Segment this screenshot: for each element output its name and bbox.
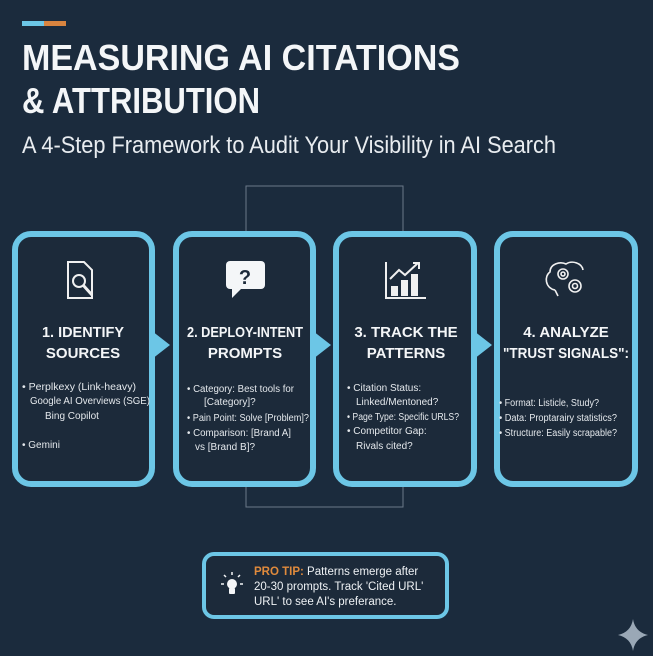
pro tip box xyxy=(204,554,447,617)
card 4 xyxy=(497,234,635,484)
bullets: • Page Type: Specific URLS? xyxy=(347,412,459,423)
title xyxy=(22,37,460,121)
tip text: PRO TIP: Patterns emerge after xyxy=(254,566,418,578)
connector lines xyxy=(246,186,403,507)
heading xyxy=(187,324,303,362)
heading: PATTERNS xyxy=(367,345,445,362)
heading: 2. DEPLOY-INTENT xyxy=(187,324,303,341)
card 1 xyxy=(15,234,152,484)
bullets: • Category: Best tools for xyxy=(187,384,295,395)
bullets: vs [Brand B]? xyxy=(195,442,255,453)
bullets: • Citation Status: xyxy=(347,383,421,394)
title: & ATTRIBUTION xyxy=(22,80,260,121)
bullets: • Perplkexy (Link-heavy) xyxy=(22,382,136,393)
bullets: • Comparison: [Brand A] xyxy=(187,428,291,439)
bullets: • Competitor Gap: xyxy=(347,426,427,437)
heading xyxy=(354,324,458,362)
bullets: • Pain Point: Solve [Problem]? xyxy=(187,413,309,424)
bullets: • Gemini xyxy=(22,440,60,451)
bullets: Rivals cited? xyxy=(356,441,413,452)
bullets: • Format: Listicle, Study? xyxy=(499,398,599,409)
heading: 3. TRACK THE xyxy=(354,324,458,341)
subtitle: A 4-Step Framework to Audit Your Visibility in AI Search xyxy=(22,132,556,159)
bullets: Linked/Mentoned? xyxy=(356,397,439,408)
bullets: • Data: Proptarairy statistics? xyxy=(499,413,617,424)
heading xyxy=(42,324,124,362)
bullets xyxy=(187,384,309,453)
tip text: URL' to see AI's preferance. xyxy=(254,596,396,608)
bullets xyxy=(499,398,617,439)
icon: question bubble: ? xyxy=(239,267,251,289)
heading: "TRUST SIGNALS": xyxy=(503,345,629,362)
icon: chart xyxy=(386,262,426,298)
heading: 4. ANALYZE xyxy=(523,324,609,341)
tip text: 20-30 prompts. Track 'Cited URL' xyxy=(254,581,423,593)
heading: 1. IDENTIFY xyxy=(42,324,124,341)
heading: PROMPTS xyxy=(208,345,282,362)
icon: lightbulb xyxy=(221,572,243,594)
icon: question bubble xyxy=(226,261,265,298)
card 3 xyxy=(336,234,474,484)
icon: brain gears xyxy=(546,262,583,296)
tip text xyxy=(254,566,423,608)
bullets xyxy=(347,383,459,452)
bullets xyxy=(22,382,150,451)
bullets: Bing Copilot xyxy=(45,411,99,422)
bullets: [Category]? xyxy=(204,397,256,408)
title: MEASURING AI CITATIONS xyxy=(22,37,460,78)
arrows xyxy=(152,331,492,359)
accent bar xyxy=(22,21,66,26)
bullets: • Structure: Easily scrapable? xyxy=(499,428,617,439)
card 2 xyxy=(176,234,313,484)
heading xyxy=(503,324,629,362)
icon: document search xyxy=(68,262,92,298)
bullets: Google AI Overviews (SGE) xyxy=(30,396,150,407)
icon: sparkle xyxy=(618,619,648,651)
heading: SOURCES xyxy=(46,345,120,362)
